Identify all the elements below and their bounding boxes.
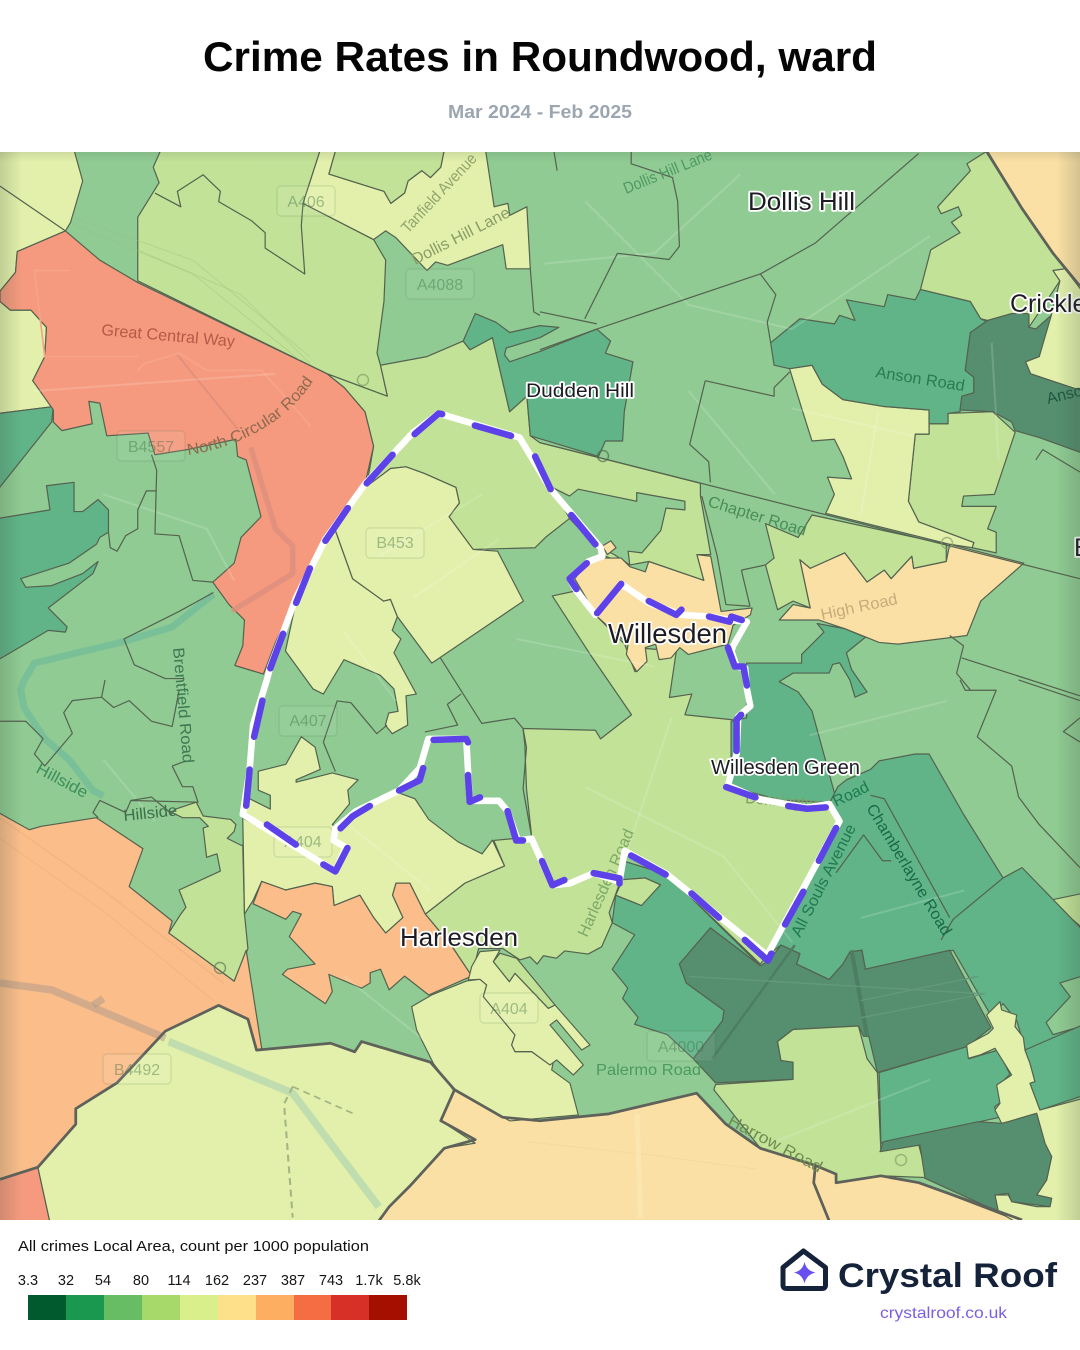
map geometry xyxy=(0,148,1080,1227)
ward boundary xyxy=(243,413,840,961)
features inside salmon area: railway and embankment xyxy=(34,271,310,610)
road number shields xyxy=(103,186,715,1084)
road number shields: B4557 xyxy=(128,439,174,456)
legend scale labels: 1.7k xyxy=(355,1273,383,1289)
road labels: Hillside xyxy=(33,761,91,802)
legend scale labels xyxy=(18,1273,421,1289)
regions: north-east quadrant xyxy=(765,148,1080,644)
regions: south-west quadrant xyxy=(0,737,1022,1222)
ward boundary: white line xyxy=(243,413,840,955)
road labels: Chapter Road xyxy=(706,494,808,540)
regions: ward interior (central coordinates) xyxy=(285,467,840,964)
road labels: Road xyxy=(830,779,872,811)
thick zone boundaries along railway xyxy=(0,150,1080,1221)
road labels: Brentfield Road xyxy=(169,647,196,764)
road number shields: A4000 xyxy=(658,1039,704,1056)
logo wordmark: Crystal Roof xyxy=(838,1257,1058,1295)
title: Crime Rates in Roundwood, ward xyxy=(203,33,877,80)
regions: central large areas xyxy=(327,314,711,580)
road labels: Donnington xyxy=(745,790,822,814)
road labels: All Souls Avenue xyxy=(788,822,860,940)
road labels: Great Central Way xyxy=(101,322,236,351)
website url: crystalroof.co.uk xyxy=(880,1305,1008,1322)
road number shields: B453 xyxy=(376,535,414,552)
choropleth map panel xyxy=(0,152,1080,1220)
place names: Willesden xyxy=(608,618,727,649)
road labels: Harrow Road xyxy=(725,1113,825,1176)
road number shields: A404 xyxy=(284,834,322,851)
street network: faint light lines xyxy=(34,174,999,1149)
legend colour ramp xyxy=(28,1295,407,1320)
road labels: High Road xyxy=(819,591,899,624)
place names: Dudden Hill xyxy=(526,380,634,402)
rivers and railway corridors xyxy=(0,217,758,1217)
map edge shading xyxy=(0,152,1080,1220)
regions: north-west quadrant xyxy=(0,150,530,674)
embedded road bands in dark zones xyxy=(689,945,985,1059)
railway line and small area boundaries xyxy=(0,150,1080,940)
road labels: Dollis Hill Lane xyxy=(409,204,513,269)
road labels: Palermo Road xyxy=(596,1062,701,1079)
road labels xyxy=(36,152,1080,1172)
road labels: Chamberlayne Road xyxy=(863,801,954,939)
legend scale labels: 32 xyxy=(58,1273,74,1289)
place names: Dollis Hill xyxy=(748,188,855,216)
icon: house with star xyxy=(783,1251,826,1288)
road number shields: A407 xyxy=(289,713,327,730)
legend scale labels: 743 xyxy=(319,1273,343,1289)
road labels: Hillside xyxy=(123,802,178,825)
ward boundary: purple dashes xyxy=(246,413,836,961)
road labels: Dollis Hill Lane xyxy=(621,147,715,198)
rail station symbols xyxy=(214,374,952,1166)
legend scale labels: 387 xyxy=(281,1273,305,1289)
road labels: North Circular Road xyxy=(188,375,313,455)
place names: Willesden Green xyxy=(711,757,860,779)
legend xyxy=(18,1239,421,1320)
legend title: All crimes Local Area, count per 1000 population xyxy=(18,1239,369,1255)
regions: south-east quadrant xyxy=(612,623,1080,1183)
legend scale labels: 162 xyxy=(205,1273,229,1289)
road labels: Tanfield Avenue xyxy=(398,150,481,237)
regions: south-east corner xyxy=(880,1002,1080,1227)
road number shields: A406 xyxy=(287,194,325,211)
road number shields: A404 xyxy=(490,1001,528,1018)
place names xyxy=(400,188,1080,952)
subtitle: date range: Mar 2024 - Feb 2025 xyxy=(448,101,632,122)
legend scale labels: 54 xyxy=(95,1273,111,1289)
legend scale labels: 80 xyxy=(133,1273,149,1289)
legend scale labels: 3.3 xyxy=(18,1273,38,1289)
legend scale labels: 237 xyxy=(243,1273,267,1289)
road number shields: A4088 xyxy=(417,277,463,294)
road number shields: B4492 xyxy=(114,1062,160,1079)
legend scale labels: 114 xyxy=(167,1273,191,1289)
legend scale labels: 5.8k xyxy=(393,1273,421,1289)
regions: south of Harlesden xyxy=(412,950,590,1121)
road labels: Harlesden Road xyxy=(575,827,638,940)
logo: Crystal Roof xyxy=(783,1251,1058,1322)
place names: Harlesden xyxy=(400,924,518,952)
road labels: Anson Road xyxy=(874,364,966,395)
